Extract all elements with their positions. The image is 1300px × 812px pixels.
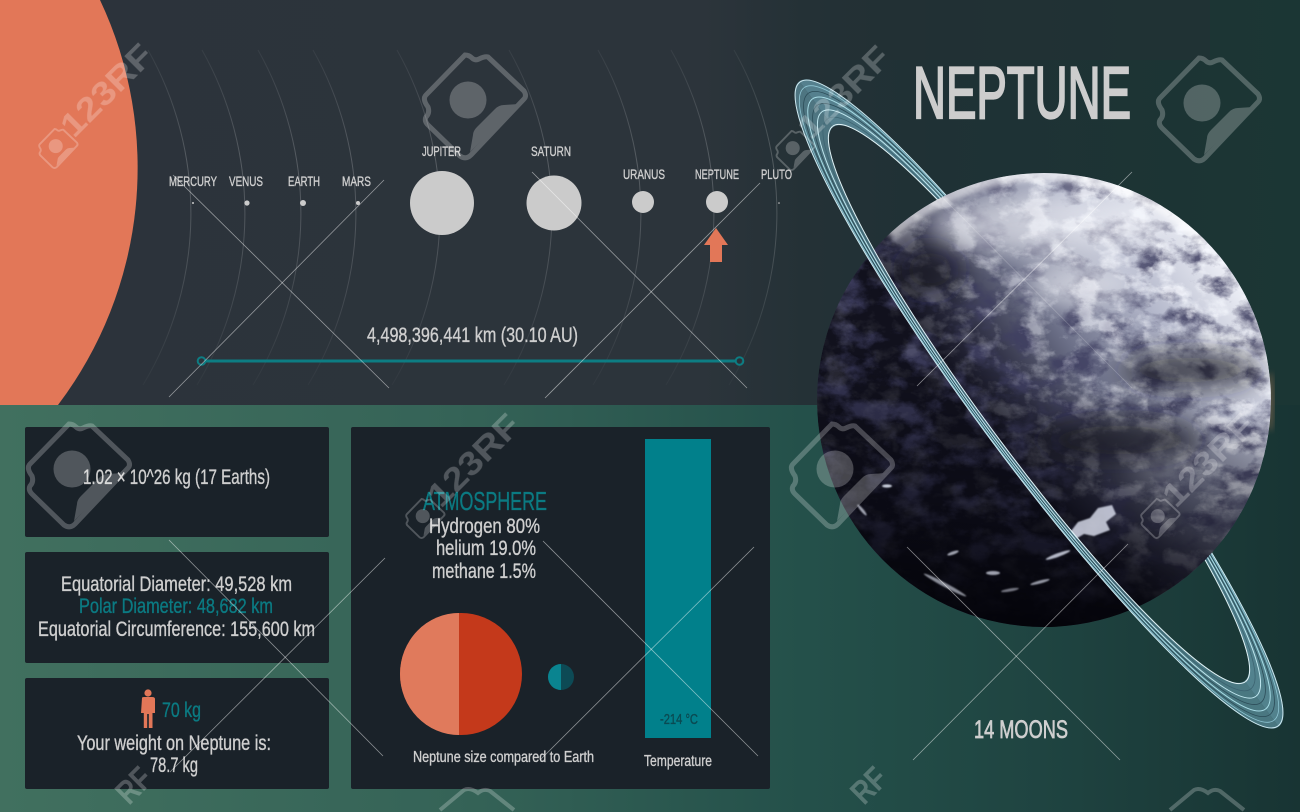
watermark text: RF: [108, 759, 159, 811]
planet labels: EARTH: [288, 173, 320, 189]
planet labels: [169, 143, 792, 189]
watermark crossing lines: [169, 172, 1132, 772]
temperature value: -214 °C: [660, 711, 698, 728]
equatorial diameter: Equatorial Diameter: 49,528 km: [61, 573, 292, 596]
mass text: 1.02 × 10^26 kg (17 Earths): [83, 466, 270, 489]
panel: diameters: [25, 552, 329, 663]
polar diameter: Polar Diameter: 48,682 km: [79, 595, 273, 618]
size caption: Neptune size compared to Earth: [413, 749, 594, 766]
atmosphere heading: ATMOSPHERE: [423, 486, 547, 516]
watermark text: 123RF: [1155, 406, 1262, 514]
planet labels: JUPITER: [422, 143, 461, 159]
panel: mass: [25, 427, 329, 537]
Neptune size circle: [400, 613, 522, 735]
atmosphere composition: [429, 515, 540, 583]
temperature caption: Temperature: [644, 753, 712, 770]
Neptune planet: [810, 165, 1280, 635]
planet labels: URANUS: [623, 166, 665, 182]
atmosphere composition: Hydrogen 80%: [429, 515, 540, 538]
planet labels: PLUTO: [761, 166, 792, 182]
watermark text: 123RF: [420, 406, 527, 514]
orbit lines: [143, 50, 777, 385]
ring back half: [799, 45, 1300, 727]
panel: weight: [25, 678, 329, 789]
equatorial circumference: Equatorial Circumference: 155,600 km: [38, 618, 315, 641]
watermark text: RF: [843, 759, 894, 811]
panel: atmosphere, size, temperature: [351, 427, 770, 789]
planet labels: MARS: [342, 173, 371, 189]
planet labels: MERCURY: [169, 173, 217, 189]
70 kg: 70 kg: [162, 699, 201, 722]
planet labels: VENUS: [229, 173, 263, 189]
icon: person: [141, 689, 155, 728]
temperature bar: [645, 439, 711, 738]
sun: [0, 0, 138, 405]
planet size circles: [192, 171, 780, 235]
atmosphere composition: helium 19.0%: [436, 537, 536, 560]
weight text: Your weight on Neptune is:: [77, 732, 271, 755]
Earth size circle: [548, 664, 574, 690]
weight value: 78.7 kg: [150, 754, 198, 777]
distance line: [198, 357, 743, 365]
watermark text: 123RF: [790, 38, 897, 146]
distance label: 4,498,396,441 km (30.10 AU): [367, 324, 578, 347]
title: NEPTUNE: [913, 53, 1131, 134]
moons label: 14 MOONS: [974, 716, 1068, 744]
top panel: solar system: [0, 0, 1300, 405]
cloud flecks on the lower limb: [856, 484, 1116, 598]
ring front half: [751, 81, 1279, 763]
atmosphere composition: methane 1.5%: [432, 560, 536, 583]
planet labels: NEPTUNE: [695, 166, 739, 182]
watermark text: 123RF: [53, 36, 160, 144]
arrow pointing at Neptune: [704, 228, 728, 262]
planet labels: SATURN: [531, 143, 571, 159]
